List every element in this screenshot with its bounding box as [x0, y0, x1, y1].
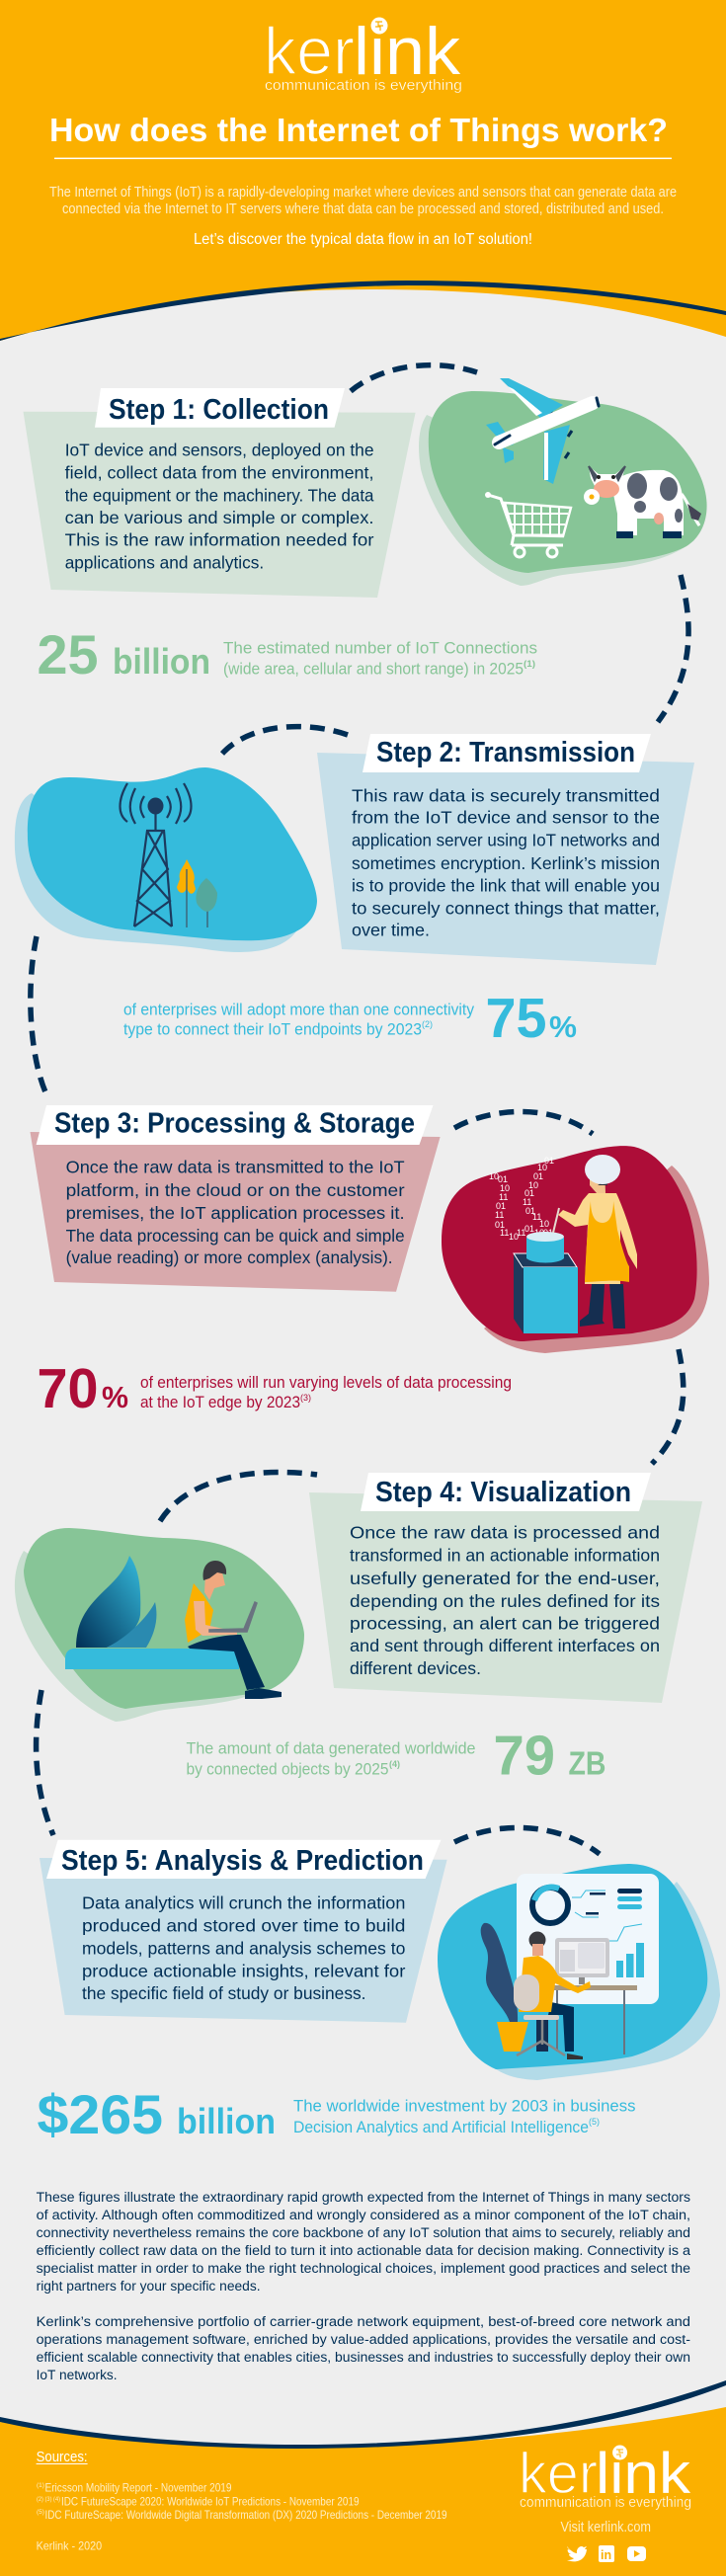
stat: $265 billion: billion — [177, 2101, 276, 2141]
stat: 75%: of enterprises will adopt more than one connectivity — [123, 1001, 474, 1019]
binary data stream: 10 — [528, 1180, 538, 1190]
stat: 25 billion — [38, 623, 537, 685]
binary data stream: 01 — [524, 1224, 534, 1234]
stat: 79 ZB: by connected objects by 2025 — [186, 1760, 389, 1779]
closing text: right partners for your specific needs. — [37, 2279, 261, 2294]
connector 7 — [160, 1472, 317, 1521]
header band — [0, 0, 726, 341]
footer logo — [519, 2442, 691, 2511]
illustration: analyst at desk on blue blob — [438, 1864, 720, 2080]
step 4 text — [350, 1523, 660, 1678]
icon: chef — [553, 1155, 637, 1328]
stat: 25 billion: (1) — [524, 659, 535, 669]
illustration: person with laptop on green blob — [15, 1528, 304, 1722]
closing text: specialist matter in order to make the right technological choices, implement good practices and select the — [37, 2261, 690, 2277]
connector 3 — [222, 727, 348, 754]
step 4 text: and sent through different interfaces on — [350, 1636, 660, 1655]
step 2 text: is to provide the link that will enable you — [352, 876, 660, 896]
step 3 text: The data processing can be quick and simple — [66, 1226, 405, 1246]
step 1 text: IoT device and sensors, deployed on the — [65, 441, 373, 460]
stat: 70%: of enterprises will run varying levels of data processing — [140, 1373, 512, 1392]
sources: (2) (3) (4) — [37, 2496, 60, 2503]
step 2 text: sometimes encryption. Kerlink’s mission — [352, 853, 660, 873]
icon: plants — [177, 859, 217, 927]
stat: 25 billion: billion — [113, 641, 210, 682]
illustration: plane, cart and cow on green blob — [419, 378, 707, 586]
connector 6 — [652, 1349, 684, 1464]
logo: kerlink — [264, 14, 462, 94]
stat: $265 billion: The worldwide investment by 2003 in business — [293, 2097, 636, 2116]
icon: desk and monitor — [550, 1938, 637, 2054]
panel: step 2 — [317, 734, 694, 965]
footer band — [0, 2380, 726, 2576]
panel: step 4 — [309, 1473, 702, 1703]
stat: 75%: % — [549, 1009, 577, 1044]
step 3 text: (value reading) or more complex (analysis). — [66, 1248, 393, 1267]
icon: youtube — [627, 2546, 646, 2561]
sources: IDC FutureScape 2020: Worldwide IoT Predictions - November 2019 — [61, 2495, 360, 2509]
binary data stream: 11 — [499, 1192, 508, 1202]
step 2 text: to securely connect things that matter, — [352, 899, 660, 919]
step 1 text: This is the raw information needed for — [65, 530, 374, 550]
connector 8 — [37, 1690, 53, 1835]
panel: step 3 — [30, 1105, 441, 1292]
step 1 text: can be various and simple or complex. — [65, 508, 373, 527]
footer logo: ker — [519, 2442, 598, 2506]
stat: 25 billion: The estimated number of IoT Connections — [223, 639, 537, 658]
step 5 text: Data analytics will crunch the information — [82, 1893, 405, 1913]
closing text: of activity. Although often commoditized and wrongly considered as a minor component of the IoT chain, — [37, 2208, 690, 2223]
step 2 text — [352, 786, 660, 940]
stat: 70% — [38, 1357, 512, 1420]
footer logo: communication is everything — [520, 2495, 691, 2511]
binary data stream: 11 — [532, 1212, 541, 1222]
step 5 text — [82, 1893, 406, 2003]
binary data stream: 10 — [537, 1163, 547, 1172]
step 3 text: Once the raw data is transmitted to the IoT — [66, 1158, 405, 1177]
step 4 text: transformed in an actionable information — [350, 1546, 660, 1566]
binary data stream: 11 — [495, 1210, 504, 1220]
icon: tower — [121, 783, 192, 926]
stat: 79 ZB: The amount of data generated worldwide — [186, 1739, 476, 1758]
binary data stream: 11 — [523, 1197, 531, 1207]
stat: 70%: at the IoT edge by 2023 — [140, 1393, 300, 1411]
sources: Sources: — [37, 2450, 88, 2465]
step 4 text: Once the raw data is processed and — [350, 1523, 660, 1543]
stat: $265 billion: Decision Analytics and Artificial Intelligence — [293, 2118, 589, 2136]
intro text: Let’s discover the typical data flow in an IoT solution! — [194, 231, 532, 248]
closing text: Kerlink’s comprehensive portfolio of carrier-grade network equipment, best-of-breed core network and — [37, 2314, 690, 2330]
binary data stream: 01 — [543, 1228, 553, 1238]
stat: 70%: % — [102, 1380, 128, 1414]
step 3 text: premises, the IoT application processes it. — [66, 1203, 405, 1223]
step 5 text: the specific field of study or business. — [82, 1983, 365, 2003]
closing text — [37, 2190, 690, 2383]
binary data stream: 01 — [524, 1188, 534, 1198]
footer logo: link — [596, 2442, 691, 2506]
closing text: operations management software, enriched by value-added applications, provides the versatile and cost- — [37, 2332, 690, 2348]
step 4 text: processing, an alert can be triggered — [350, 1613, 660, 1633]
closing text: connectivity nevertheless remains the core backbone of any IoT solution that aims to securely, reliably and — [37, 2225, 690, 2241]
binary data stream: 11 — [517, 1228, 525, 1238]
closing text: IoT networks. — [37, 2368, 118, 2383]
step 4 heading: Step 4: Visualization — [375, 1477, 631, 1508]
logo: kerlink: link — [354, 14, 461, 89]
step 2 text: application server using IoT networks and — [352, 831, 660, 850]
panel: step 5 — [40, 1840, 447, 2023]
step 3 text: platform, in the cloud or on the customer — [66, 1180, 405, 1200]
stat: $265 billion — [38, 2083, 636, 2145]
stat: 25 billion: 25 — [38, 623, 99, 685]
stat: 75% — [123, 987, 577, 1050]
step 4 text: usefully generated for the end-user, — [350, 1569, 660, 1588]
icon: cow — [584, 466, 701, 538]
step 2 text: This raw data is securely transmitted — [352, 786, 660, 806]
stat: 79 ZB: 79 — [494, 1725, 555, 1788]
binary data stream: 10 — [534, 1228, 544, 1238]
binary data stream: 01 — [525, 1206, 535, 1216]
icon: twitter — [567, 2546, 587, 2561]
step 5 text: produce actionable insights, relevant for — [82, 1962, 406, 1981]
step 2 text: over time. — [352, 921, 430, 940]
illustration: chef stirring data on red blob — [442, 1146, 709, 1353]
footer link: Visit kerlink.com — [561, 2519, 651, 2536]
binary data stream: 10 — [500, 1183, 510, 1193]
step 1 text: applications and analytics. — [65, 553, 264, 573]
binary data stream: 01 — [544, 1156, 554, 1166]
sources: (5) — [37, 2509, 44, 2516]
connector 4 — [31, 936, 46, 1094]
logo: kerlink: communication is everything — [265, 77, 462, 94]
binary data stream — [489, 1156, 554, 1242]
stat: 75%: type to connect their IoT endpoints by 2023 — [123, 1020, 422, 1039]
step 2 heading: Step 2: Transmission — [376, 737, 635, 768]
icon: cushion — [65, 1649, 239, 1669]
connector 1 — [351, 365, 477, 391]
stat: 79 ZB: ZB — [569, 1745, 606, 1782]
binary data stream: 10 — [539, 1219, 549, 1229]
step 5 heading: Step 5: Analysis & Prediction — [61, 1845, 424, 1877]
stat: $265 billion: (5) — [589, 2117, 600, 2127]
binary data stream: 10 — [509, 1232, 519, 1242]
illustration: antenna on blue blob — [15, 767, 317, 952]
icon: person with laptop — [185, 1561, 282, 1699]
icon: linkedin: in — [601, 2548, 611, 2562]
step 1 text: field, collect data from the environment, — [65, 462, 373, 482]
icon: leaves — [76, 1556, 156, 1648]
stat: $265 billion: $265 — [38, 2083, 163, 2145]
intro text — [49, 185, 677, 248]
logo: kerlink: ker — [264, 14, 355, 89]
connector 2 — [658, 575, 688, 722]
sources — [37, 2450, 447, 2553]
binary data stream: 01 — [496, 1201, 506, 1211]
step 4 text: different devices. — [350, 1658, 481, 1678]
stat: 70%: 70 — [38, 1357, 99, 1420]
stat: 79 ZB — [186, 1725, 606, 1788]
icon: plant — [481, 1923, 528, 2052]
icon: plane — [486, 378, 599, 484]
step 3 heading: Step 3: Processing & Storage — [54, 1108, 415, 1140]
connector 5 — [454, 1111, 593, 1134]
closing text: efficiently collect raw data on the field to turn it into actionable data for decision making. Connectivity is a — [37, 2243, 690, 2259]
binary data stream: 10 — [489, 1171, 499, 1181]
step 5 text: produced and stored over time to build — [82, 1916, 405, 1936]
connector 9 — [454, 1827, 600, 1854]
binary data stream: 11 — [500, 1228, 509, 1238]
icon: machine — [514, 1232, 578, 1333]
stat: 75%: (2) — [422, 1019, 433, 1029]
sources: Kerlink - 2020 — [37, 2539, 102, 2553]
stat: 70%: (3) — [300, 1393, 311, 1403]
step 3 text — [66, 1158, 405, 1267]
panel: step 1 — [24, 388, 416, 598]
closing text: These figures illustrate the extraordinary rapid growth expected from the Internet of Things in many sectors — [37, 2190, 690, 2206]
social icons — [567, 2545, 646, 2562]
step 5 text: models, patterns and analysis schemes to — [82, 1939, 405, 1959]
binary data stream: 01 — [495, 1220, 505, 1230]
stat: 25 billion: (wide area, cellular and short range) in 2025 — [223, 660, 524, 679]
icon: analyst — [514, 1932, 591, 2059]
title: How does the Internet of Things work? — [49, 112, 668, 148]
binary data stream: 01 — [498, 1174, 508, 1184]
stat: 75%: 75 — [486, 987, 547, 1050]
step 4 text: depending on the rules defined for its — [350, 1591, 660, 1611]
closing text: efficient scalable connectivity that enables cities, businesses and industries to successfully deploy their own — [37, 2350, 690, 2366]
dashboard board — [517, 1874, 659, 2004]
sources: Ericsson Mobility Report - November 2019 — [45, 2481, 232, 2495]
binary data stream: 01 — [533, 1171, 543, 1181]
stat: 79 ZB: (4) — [389, 1759, 400, 1769]
step 1 text — [65, 441, 374, 573]
step 1 heading: Step 1: Collection — [109, 394, 329, 426]
step 2 text: from the IoT device and sensor to the — [352, 807, 660, 827]
sources: IDC FutureScape: Worldwide Digital Transformation (DX) 2020 Predictions - December 2019 — [45, 2508, 447, 2522]
icon: shopping cart — [485, 492, 571, 557]
step 1 text: the equipment or the machinery. The data — [65, 486, 374, 506]
sources: (1) — [37, 2482, 44, 2489]
